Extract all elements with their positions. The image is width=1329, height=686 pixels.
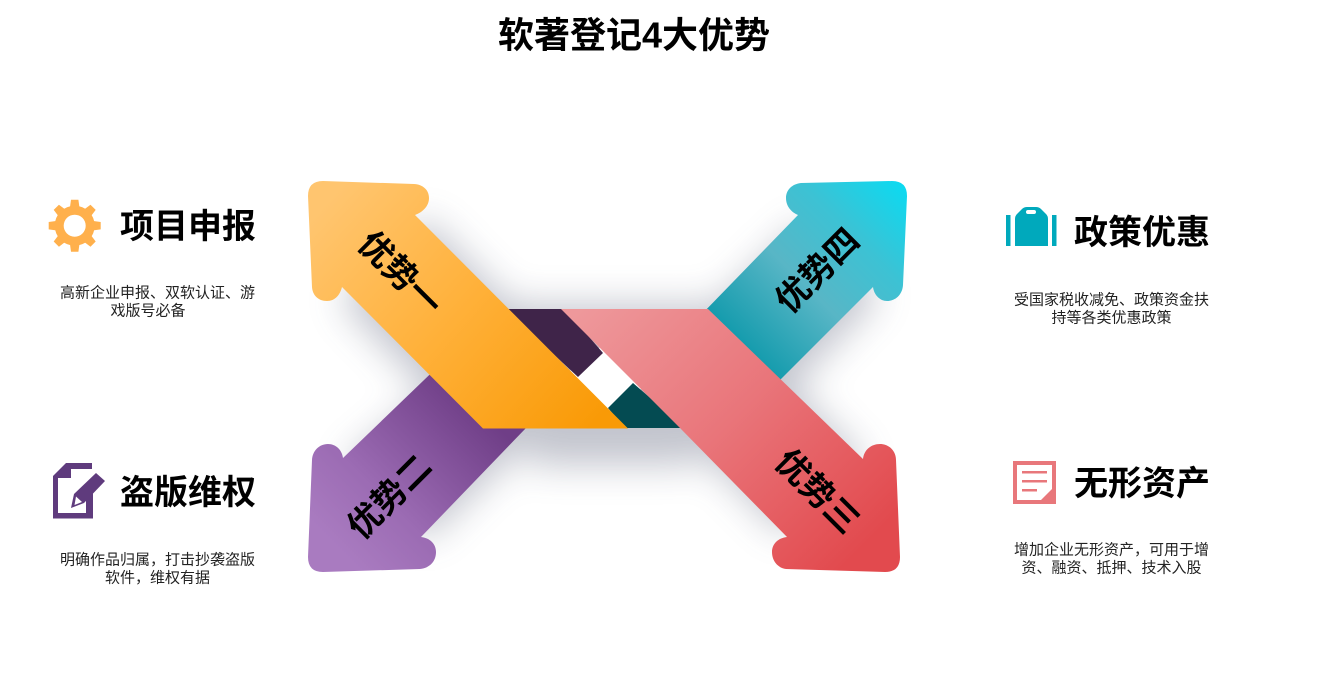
label: 优势一: 优势一 — [351, 225, 449, 323]
panel: 盗版维权 — [53, 463, 256, 586]
panel: 项目申报 — [49, 200, 256, 320]
text block — [1014, 292, 1209, 326]
text block: 资、融资、抵押、技术入股 — [1021, 560, 1202, 576]
panel: 政策优惠 — [1006, 207, 1210, 326]
title: 软著登记4大优势 — [498, 14, 770, 56]
heading: 盗版维权 — [120, 474, 256, 512]
arrow: pink 优势三 — [561, 309, 900, 572]
arrow: purple 优势二 — [308, 355, 526, 572]
heading: 政策优惠 — [1074, 214, 1210, 252]
text block: 持等各类优惠政策 — [1051, 308, 1172, 326]
text block — [60, 284, 255, 320]
text block: 明确作品归属，打击抄袭盗版 — [60, 552, 255, 568]
icon: gear — [49, 200, 101, 252]
text block: 受国家税收减免、政策资金扶 — [1014, 292, 1209, 308]
text block: 高新企业申报、双软认证、游 — [60, 284, 255, 302]
icon: bag — [1006, 207, 1056, 246]
center band: dark purple — [505, 309, 603, 377]
arrow: teal 优势四 — [700, 181, 907, 388]
text block — [60, 552, 255, 586]
text block — [1014, 540, 1209, 576]
center gap: white — [570, 345, 645, 420]
label: 优势三: 优势三 — [768, 443, 866, 541]
label: 优势四: 优势四 — [769, 222, 867, 320]
heading: 项目申报 — [120, 208, 256, 246]
text block: 增加企业无形资产，可用于增 — [1014, 540, 1209, 558]
heading: 无形资产 — [1074, 465, 1210, 503]
cross shadow — [340, 218, 880, 540]
icon: note — [1013, 461, 1056, 504]
text block: 软件，维权有据 — [105, 570, 210, 586]
center band: dark teal — [608, 383, 685, 428]
panel: 无形资产 — [1013, 461, 1210, 576]
text block: 戏版号必备 — [110, 302, 186, 320]
arrow: orange 优势一 — [308, 181, 628, 428]
icon: document with pen — [53, 463, 105, 518]
label: 优势二: 优势二 — [341, 448, 439, 546]
